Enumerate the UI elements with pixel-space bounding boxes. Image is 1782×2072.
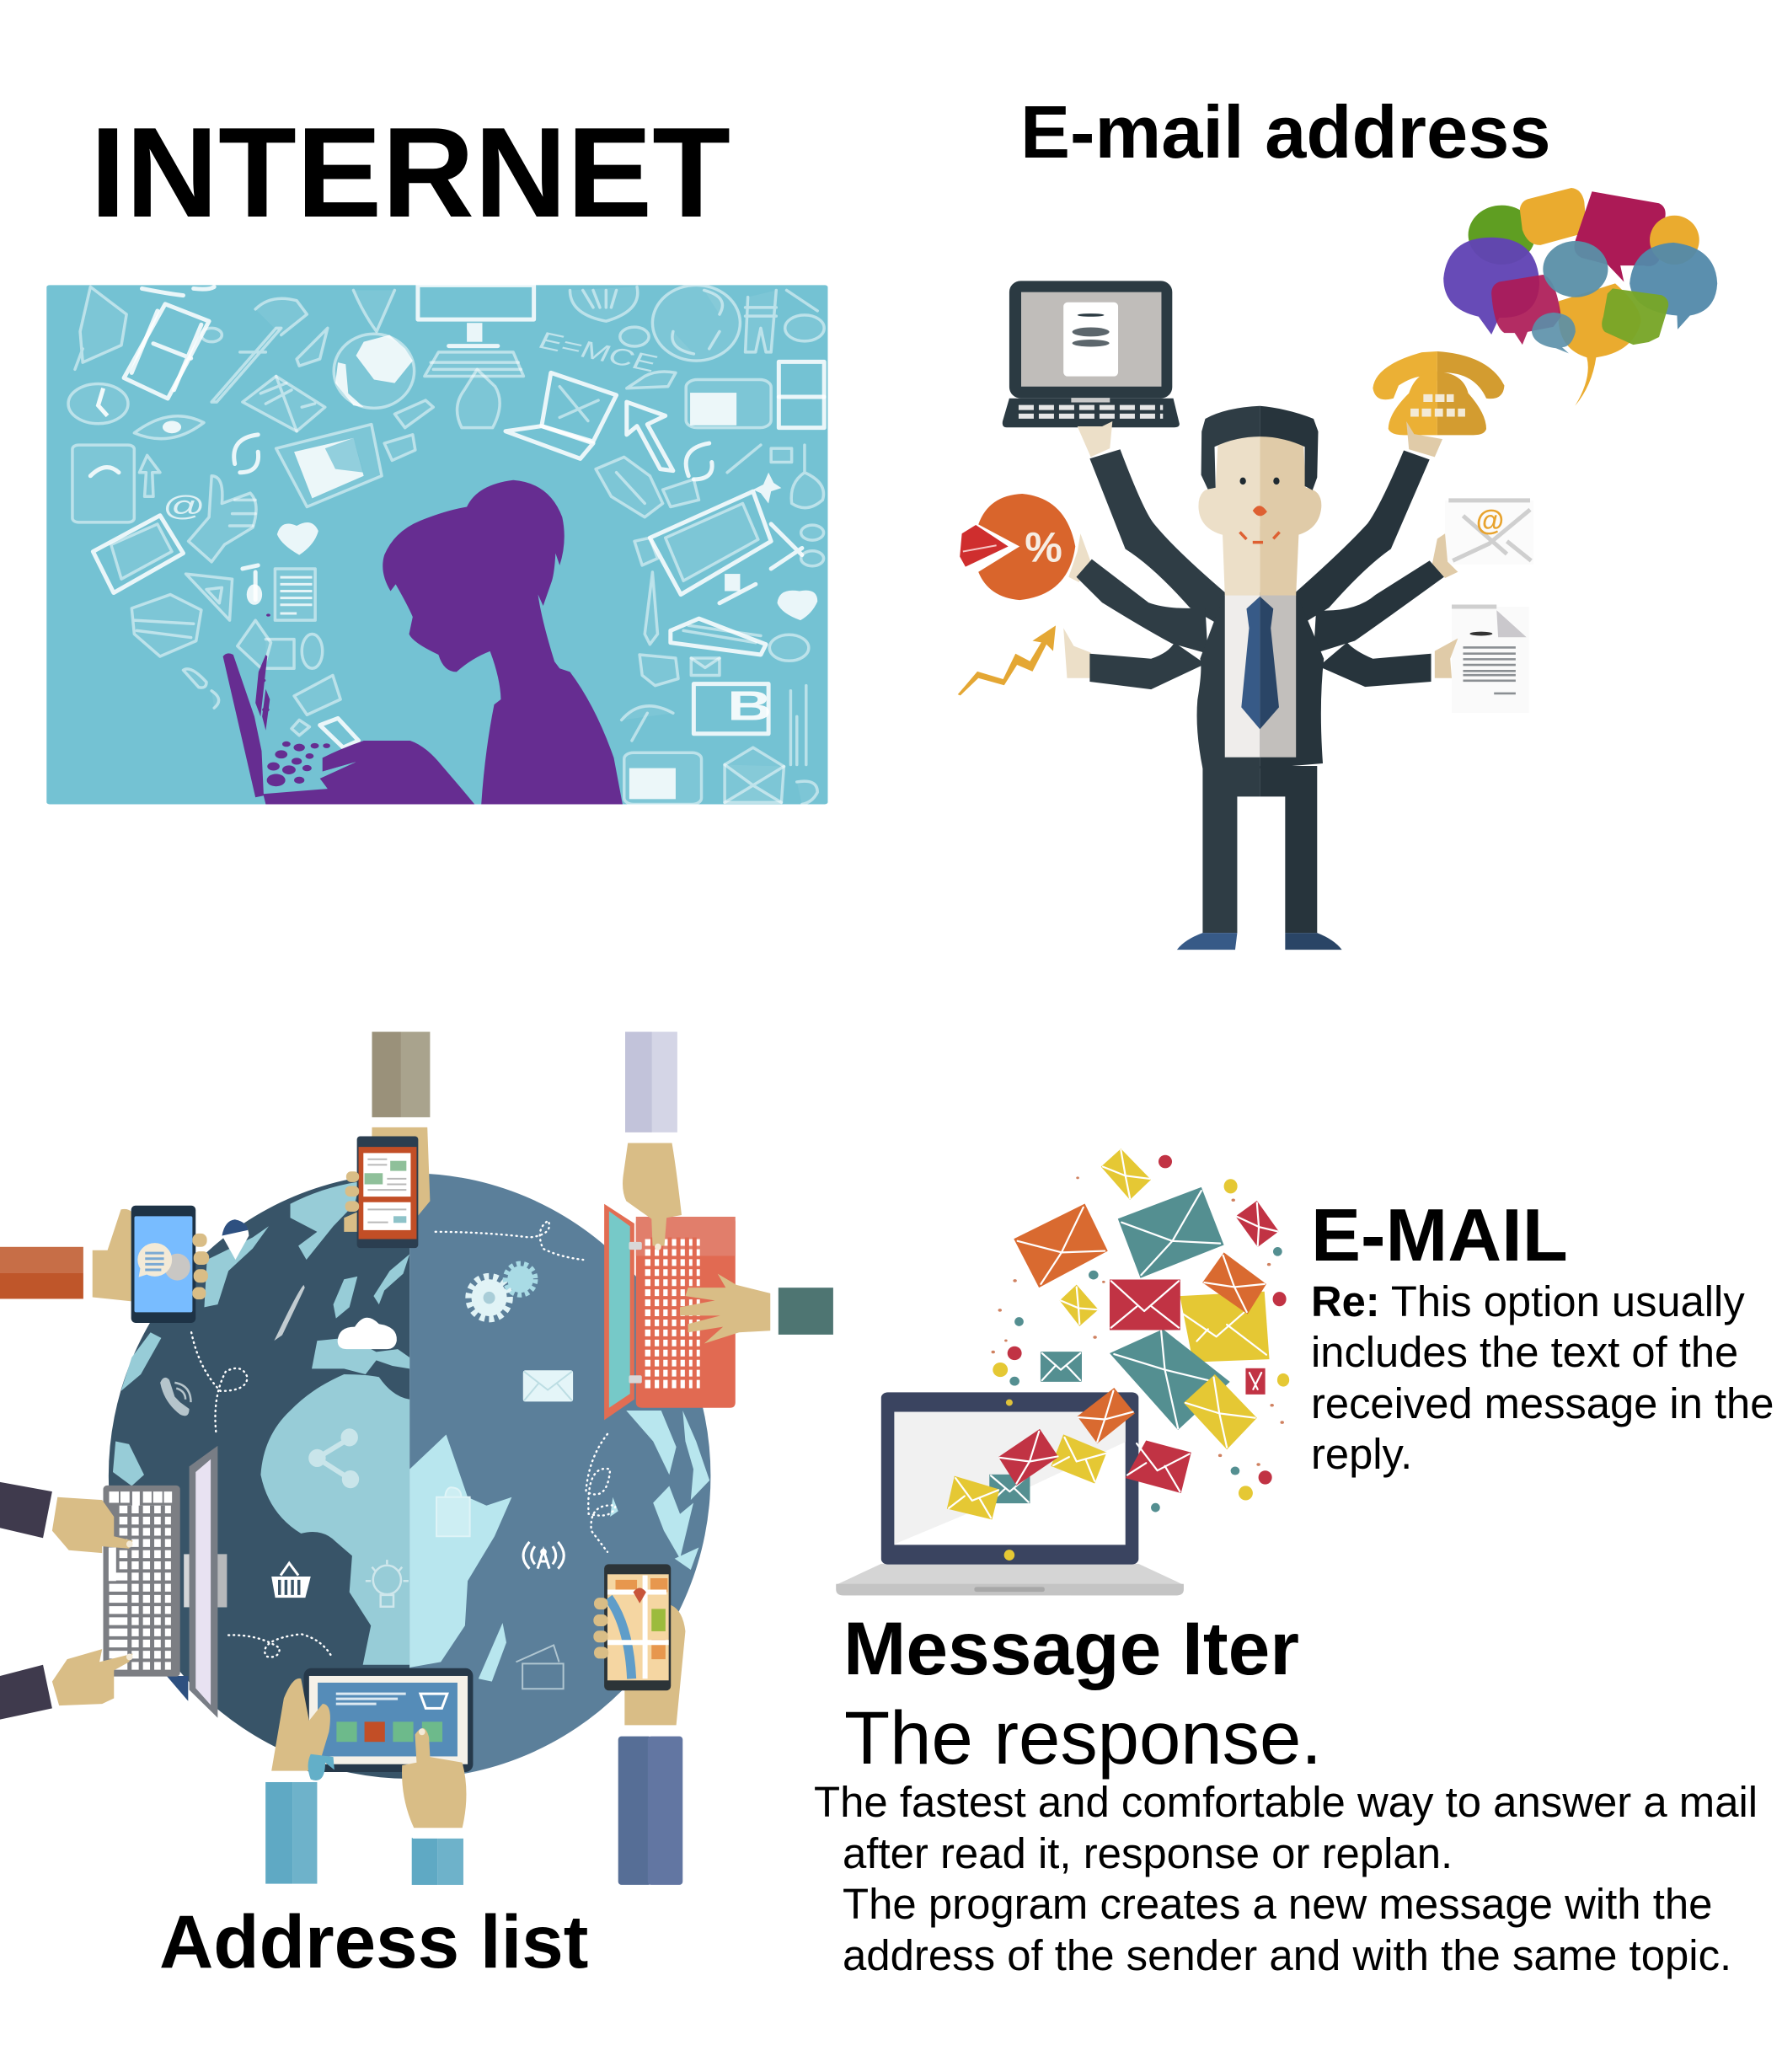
icon: pie chart: % <box>1025 524 1062 571</box>
icon: e-mail envelope <box>1445 501 1533 565</box>
doodles: internet icons cloud: B <box>727 683 772 729</box>
globe <box>109 1173 710 1779</box>
text block: response description: The fastest and comfortable way to answer a mail <box>814 1778 1758 1826</box>
neck <box>1223 526 1260 596</box>
icon: telephone <box>1373 351 1504 435</box>
heading: Address list: Address list <box>159 1899 588 1984</box>
arms left <box>1089 449 1225 628</box>
hair <box>1201 406 1260 490</box>
text block: response description: after read it, response or replan. <box>843 1829 1453 1877</box>
heading: The response: The response. <box>844 1696 1322 1780</box>
hand: top right with red laptop <box>604 1032 833 1420</box>
illustration: laptop with flying envelopes <box>836 1148 1289 1595</box>
figure: man in suit <box>1063 406 1458 950</box>
doodles: internet icons cloud: @ <box>163 490 206 522</box>
panel: woman at laptop with internet doodles <box>46 285 827 804</box>
torso left <box>1197 592 1260 768</box>
text block: Re option: Re: This option usually <box>1311 1277 1745 1325</box>
text block: Re option: reply. <box>1311 1430 1412 1478</box>
face <box>1198 434 1260 546</box>
icon: laptop <box>1003 281 1180 427</box>
heading: Message Iter: Message Iter <box>843 1606 1299 1690</box>
text block: Re option: received message in the <box>1311 1379 1774 1427</box>
shirt <box>1225 595 1260 758</box>
text block: response description: address of the sender and with the same topic. <box>843 1931 1731 1979</box>
legs <box>1202 766 1260 933</box>
icon: speech bubbles <box>1443 188 1717 406</box>
hand: right with map phone <box>593 1564 685 1885</box>
illustration: multi-armed businessman <box>958 188 1717 950</box>
hands: left with keyboard and monitor <box>0 1446 227 1720</box>
text block: Re option: includes the text of the <box>1311 1328 1738 1376</box>
arms right <box>1296 451 1430 628</box>
tie <box>1241 597 1260 729</box>
confetti dots <box>991 1155 1289 1512</box>
icon: pie chart <box>960 494 1075 600</box>
silhouette: woman and laptop <box>223 480 623 804</box>
text block: response description: The program creates a new message with the <box>843 1880 1712 1928</box>
doodles: internet icons cloud <box>68 285 824 804</box>
title: INTERNET: INTERNET <box>90 101 730 244</box>
heading: E-mail address: E-mail address <box>1020 90 1551 174</box>
envelopes <box>947 1148 1279 1519</box>
continents right half <box>409 1435 511 1668</box>
globe icons <box>338 1318 397 1349</box>
icon: growth arrow <box>958 625 1056 695</box>
hands: bottom with shopping tablet <box>265 1668 473 1885</box>
continents left half <box>260 1374 409 1665</box>
shoes <box>1177 933 1237 950</box>
eyes, nose, mouth <box>1239 478 1246 485</box>
icon: document <box>1452 607 1529 713</box>
doodles: internet icons cloud: E=MCE <box>534 328 661 377</box>
laptop <box>836 1392 1184 1595</box>
icon: e-mail envelope: @ <box>1476 505 1504 537</box>
hand: left with chat phone <box>0 1206 249 1323</box>
hand: top with news tablet phone <box>344 1032 430 1248</box>
illustration: globe with devices and hands <box>0 1032 833 1885</box>
hands <box>1078 421 1112 457</box>
heading: E-MAIL: E-MAIL <box>1311 1193 1568 1277</box>
